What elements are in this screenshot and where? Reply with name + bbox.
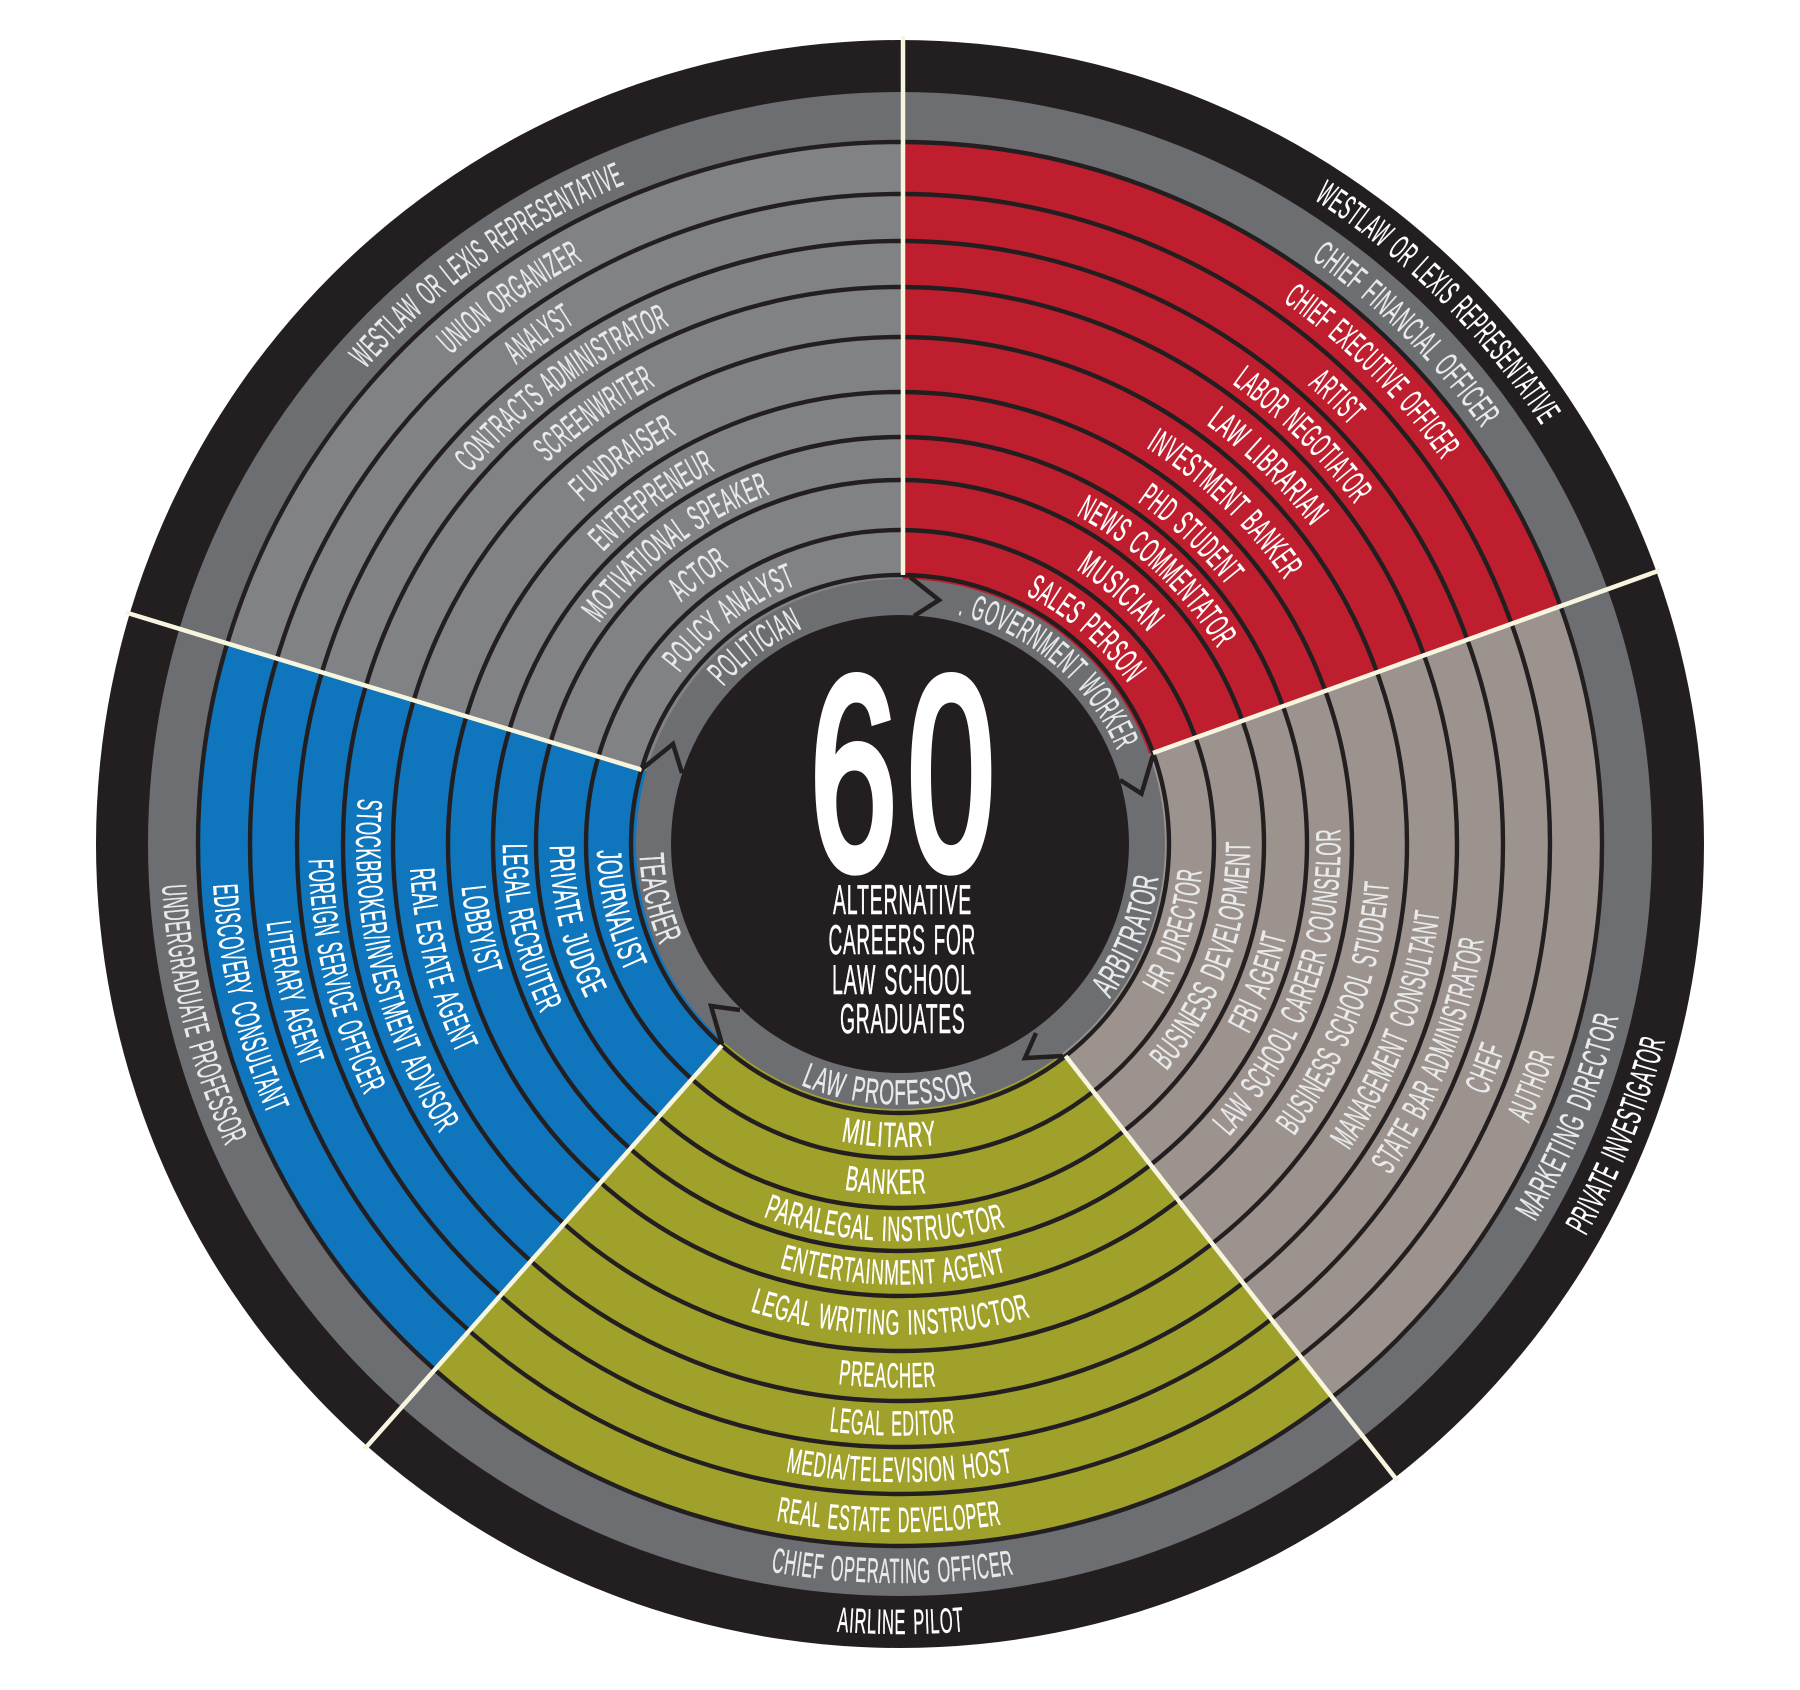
label: Musician: MUSICIAN: [1077, 550, 1166, 632]
label: Lobbyist: LOBBYIST: [454, 884, 510, 979]
label: Legal Recruiter: LEGAL RECRUITER: [495, 844, 569, 1018]
panel: red sector careers: [903, 144, 1562, 754]
tan sector wedge: [1063, 606, 1602, 1397]
label: Marketing Director: MARKETING DIRECTOR: [1514, 1014, 1619, 1221]
label: Policy Analyst: POLICY ANALYST: [661, 562, 792, 672]
blue sector wedge: [198, 644, 724, 1370]
text: GRADUATES: [840, 995, 966, 1042]
gray sector wedge: [228, 142, 903, 771]
label: Airline Pilot: AIRLINE PILOT: [836, 1600, 965, 1642]
label: Fundraiser: FUNDRAISER: [567, 415, 676, 502]
label: Analyst: ANALYST: [504, 302, 572, 365]
outer gray ring: [148, 92, 1652, 1596]
label: Legal Writing Instructor: LEGAL WRITING INSTRUCTOR: [748, 1282, 1033, 1343]
label: Management Consultant: MANAGEMENT CONSULTANT: [1330, 910, 1439, 1150]
label: Teacher: TEACHER: [631, 852, 689, 949]
label: Legal Editor: LEGAL EDITOR: [828, 1400, 957, 1444]
label: HR Director: HR DIRECTOR: [1142, 870, 1202, 994]
center number 60: 60: [810, 622, 1006, 925]
label: Chief Executive Officer: CHIEF EXECUTIVE OFFICER: [1286, 284, 1460, 460]
label: Business Development: BUSINESS DEVELOPMENT: [1148, 842, 1250, 1070]
label: Union Organizer: UNION ORGANIZER: [435, 242, 582, 352]
label: Motivational Speaker: MOTIVATIONAL SPEAKER: [580, 473, 770, 622]
label: Private Investigator: PRIVATE INVESTIGATOR: [1565, 1037, 1666, 1236]
panel: gray sector careers: [230, 144, 903, 771]
label: Preacher: PREACHER: [837, 1353, 937, 1396]
label: State Bar Administrator: STATE BAR ADMINISTRATOR: [1372, 938, 1484, 1173]
label: Arbitrator: ARBITRATOR: [1093, 876, 1159, 1000]
label: FBI Agent: FBI AGENT: [1228, 930, 1286, 1034]
panel: olive sector careers: [438, 1042, 1329, 1634]
text: ALTERNATIVE: [833, 876, 972, 923]
label: Chief Operating Officer: CHIEF OPERATING OFFICER: [769, 1541, 1016, 1591]
label: Screenwriter: SCREENWRITER: [533, 366, 656, 461]
label: Entertainment Agent: ENTERTAINMENT AGENT: [780, 1244, 1002, 1285]
label: Real Estate Developer: REAL ESTATE DEVELOPER: [775, 1490, 1003, 1540]
label: Artist: ARTIST: [1308, 370, 1367, 423]
label: Westlaw or Lexis Representative: WESTLAW OR LEXIS REPRESENTATIVE: [1316, 179, 1562, 425]
panel: blue sector careers: [162, 646, 724, 1366]
panel: tan sector careers: [1063, 609, 1666, 1394]
center black circle: [671, 615, 1129, 1073]
label: Paralegal Instructor: PARALEGAL INSTRUCTOR: [764, 1194, 1005, 1242]
arrows: clockwise chevrons on the inner ring: [642, 577, 1153, 1058]
center tagline: [828, 876, 976, 1042]
olive sector wedge: [435, 1042, 1332, 1546]
label: Chief Financial Officer: CHIEF FINANCIAL OFFICER: [1314, 242, 1500, 428]
label: Real Estate Agent: REAL ESTATE AGENT: [402, 867, 485, 1058]
label: Business School Student: BUSINESS SCHOOL STUDENT: [1275, 881, 1389, 1136]
label: Law Librarian: LAW LIBRARIAN: [1207, 406, 1330, 526]
label: Media/Television Host: MEDIA/TELEVISION HOST: [784, 1441, 1015, 1490]
label: Journalist: JOURNALIST: [589, 849, 654, 976]
label: Banker: BANKER: [846, 1166, 926, 1194]
label: Labor Negotiator: LABOR NEGOTIATOR: [1233, 364, 1372, 504]
label: Actor: ACTOR: [668, 548, 729, 602]
label: PhD Student: PHD STUDENT: [1138, 482, 1246, 583]
label: Investment Banker: INVESTMENT BANKER: [1147, 428, 1302, 580]
label: Westlaw or Lexis Representative: WESTLAW OR LEXIS REPRESENTATIVE: [347, 162, 624, 367]
label: Law School Career Counselor: LAW SCHOOL CAREER COUNSELOR: [1212, 830, 1341, 1136]
label: Entrepreneur: ENTREPRENEUR: [587, 450, 716, 552]
label: Politician: POLITICIAN: [706, 607, 802, 686]
label: Military: MILITARY: [842, 1118, 934, 1148]
text: CAREERS FOR: [828, 916, 976, 963]
label: Literary Agent: LITERARY AGENT: [259, 919, 331, 1070]
label: Contracts Administrator: CONTRACTS ADMINISTRATOR: [455, 304, 670, 470]
inner arrow ring: [631, 575, 1169, 1113]
label: News Commentator: NEWS COMMENTATOR: [1077, 494, 1236, 648]
label: Undergraduate Professor: UNDERGRADUATE PROFESSOR: [154, 883, 254, 1150]
label: Author: AUTHOR: [1508, 1050, 1555, 1124]
label: Sales Person: SALES PERSON: [1028, 575, 1147, 682]
red sector wedge: [903, 142, 1560, 754]
label: eDiscovery Consultant: EDISCOVERY CONSULTANT: [205, 883, 296, 1118]
label: Stockbroker/Investment Advisor: STOCKBROKER/INVESTMENT ADVISOR: [348, 798, 467, 1138]
label: Private Judge: PRIVATE JUDGE: [542, 845, 614, 1003]
label: Chef: CHEF: [1466, 1041, 1502, 1092]
label: Foreign Service Officer: FOREIGN SERVICE OFFICER: [301, 858, 393, 1099]
text: LAW SCHOOL: [832, 956, 972, 1003]
label: Law Professor: LAW PROFESSOR: [802, 1062, 976, 1105]
label: Government Worker: . GOVERNMENT WORKER: [958, 596, 1138, 750]
